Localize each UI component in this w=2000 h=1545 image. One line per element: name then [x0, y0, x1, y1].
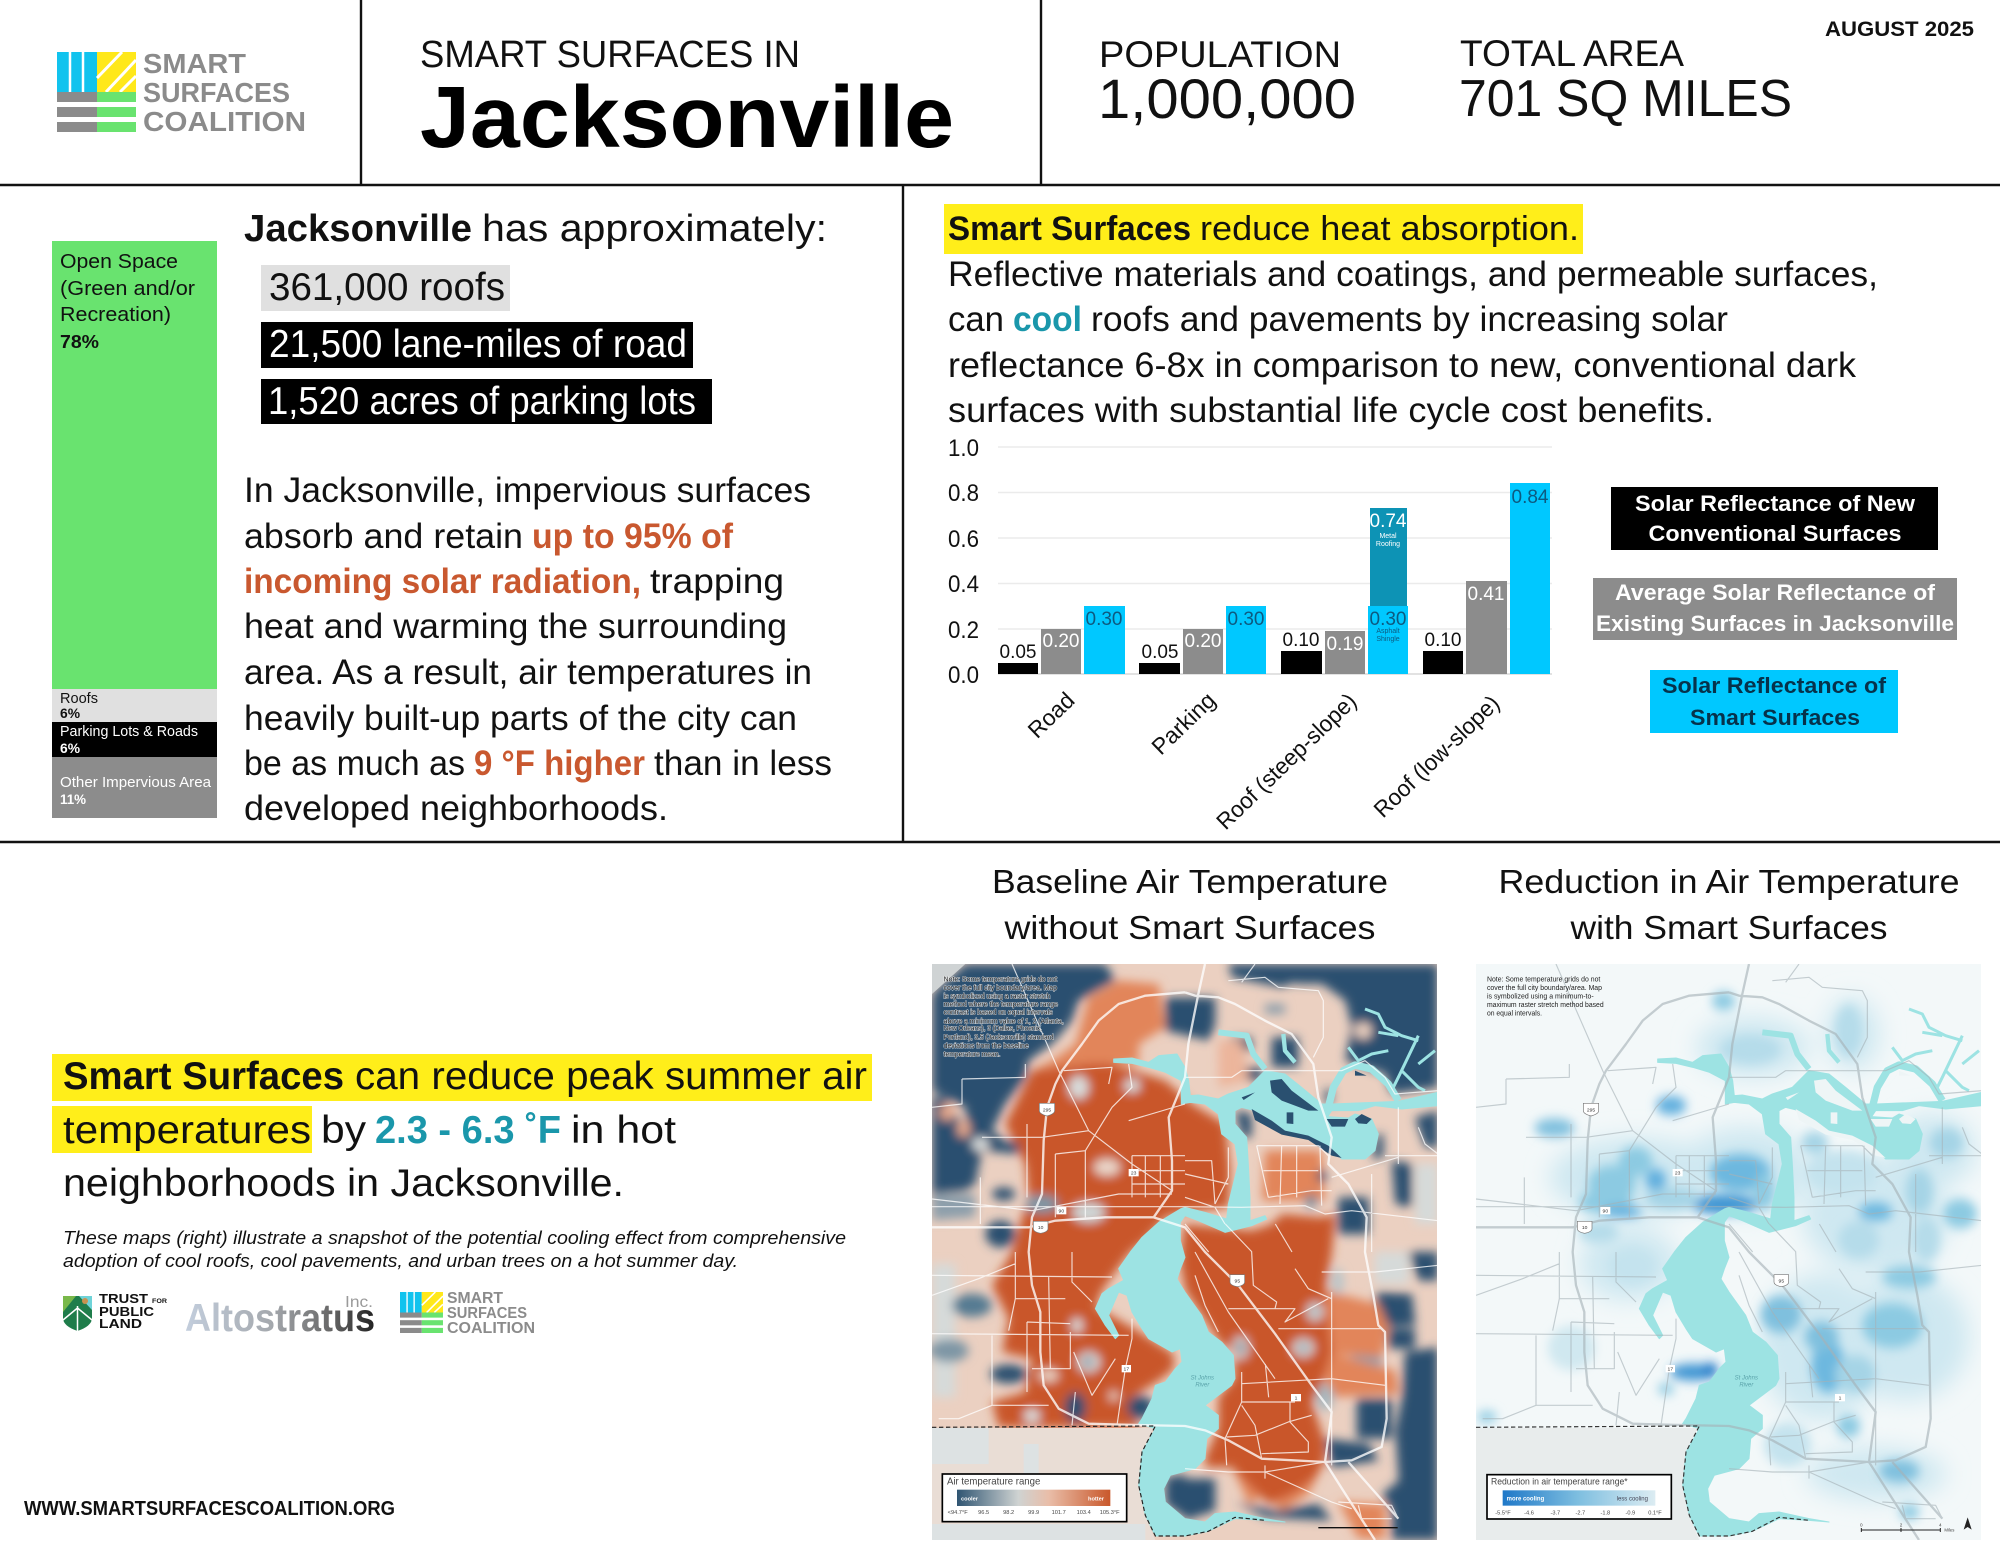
paragraph: impervious surfaces: heavily built-up parts of the city can: [244, 699, 797, 738]
stacked land cover bar: [52, 241, 217, 818]
highway shields: 90: [1603, 1209, 1608, 1215]
legend: smart surfaces: Smart Surfaces: [1690, 705, 1860, 730]
total area stat: 701 SQ MILES: [1459, 70, 1792, 128]
paragraph: impervious surfaces: trapping: [650, 562, 784, 601]
bars: roof low-slope: 0.84: [1512, 487, 1549, 508]
map legend: air temperature range: 101.7: [1052, 1510, 1066, 1516]
map legend: reduction range: Reduction in air temperature range*: [1491, 1476, 1628, 1486]
legend: new conventional: Solar Reflectance of New: [1635, 491, 1916, 516]
heading: Jacksonville has approximately: [244, 208, 827, 250]
paragraph: impervious surfaces: area. As a result, air temperatures in: [244, 653, 812, 692]
segment: other impervious: 11%: [60, 791, 87, 807]
x axis labels: Parking: [1146, 687, 1220, 760]
river label: [1190, 1375, 1214, 1386]
stat: road: 21,500 lane-miles of road: [269, 323, 687, 366]
map note: Note: Some temperature grids do not: [944, 976, 1057, 983]
map title: baseline: [992, 863, 1388, 946]
bars: roof steep-slope: 0.19: [1327, 634, 1363, 655]
logo: Trust for Public Land: PUBLIC: [99, 1304, 155, 1319]
segment: open space: 78%: [60, 332, 99, 352]
map legend: air temperature range: cooler: [961, 1496, 979, 1502]
bars: road: [998, 606, 1125, 674]
paragraph: reflective materials: roofs and pavements by increasing solar: [1091, 300, 1728, 339]
highway shields: 1: [1839, 1396, 1842, 1402]
bars: roof steep-slope: Asphalt: [1376, 628, 1400, 635]
bars: roof steep-slope: 0.74: [1370, 511, 1407, 532]
segment: roofs: Roofs: [60, 690, 98, 707]
paragraph: reflective materials: [948, 255, 1878, 430]
logo: Smart Surfaces Coalition: SMART: [143, 48, 246, 79]
bar chart: solar reflectance: [948, 435, 1552, 834]
y axis labels: 0.0: [948, 662, 979, 689]
date: AUGUST 2025: [1825, 18, 1974, 41]
river label: River: [1195, 1383, 1210, 1389]
scale bar and north arrow: Miles: [1944, 1527, 1954, 1532]
heading: peak summer air temperatures: in hot: [571, 1109, 676, 1152]
paragraph: impervious surfaces: absorb and retain: [244, 517, 523, 556]
segment: open space: [52, 241, 217, 689]
y axis labels: 0.8: [948, 480, 979, 507]
river label: St Johns: [1735, 1375, 1758, 1381]
website: WWW.SMARTSURFACESCOALITION.ORG: [24, 1498, 395, 1520]
x axis labels: [1023, 687, 1504, 834]
map legend: reduction range: -1.8: [1600, 1510, 1610, 1516]
map legend: air temperature range: 96.5: [978, 1510, 989, 1516]
paragraph: impervious surfaces: incoming solar radiation,: [244, 562, 641, 601]
bars: parking: 0.05: [1142, 642, 1178, 663]
heading: Smart Surfaces reduce heat absorption: [944, 204, 1583, 254]
bars: roof steep-slope: Roofing: [1376, 541, 1400, 548]
legend: existing average: Average Solar Reflectance of: [1615, 580, 1936, 605]
logo: Smart Surfaces Coalition small: [400, 1290, 535, 1337]
faint cooling haze: [1549, 997, 1976, 1501]
highway shields: 10: [1038, 1225, 1044, 1231]
map note: on equal intervals.: [1487, 1010, 1542, 1017]
logo: Smart Surfaces Coalition small: COALITION: [447, 1320, 535, 1337]
logo: Smart Surfaces Coalition small: SMART: [447, 1290, 503, 1307]
map note: New Orleans), 3 (Dallas, Phoenix,: [944, 1026, 1042, 1033]
stat: roofs: 361,000 roofs: [269, 266, 505, 309]
heading: peak summer air temperatures: 2.3 - 6.3 ˚F: [375, 1109, 561, 1152]
paragraph: impervious surfaces: developed neighborhoods.: [244, 789, 668, 828]
segment: parking and roads: 6%: [60, 740, 81, 756]
map legend: reduction range: 0.1°F: [1648, 1510, 1662, 1516]
highway shields: [1577, 1103, 1845, 1402]
map legend: reduction range: less cooling: [1617, 1496, 1648, 1502]
map caption: adoption of cool roofs, cool pavements, and urban trees on a hot summer day.: [63, 1251, 738, 1271]
light orange areas: [1032, 981, 1399, 1539]
paragraph: reflective materials: Reflective materials and coatings, and permeable surfaces,: [948, 255, 1878, 294]
heading: peak summer air temperatures: [52, 1054, 872, 1205]
bars: road: 0.30: [1086, 609, 1122, 630]
map legend: reduction range: -2.7: [1575, 1510, 1585, 1516]
paragraph: impervious surfaces: 9 °F higher: [474, 744, 645, 783]
x axis labels: Roof (steep-slope): [1211, 688, 1361, 834]
map note: cover the full city boundary/area. Map: [944, 985, 1057, 992]
segment: open space: (Green and/or: [60, 278, 195, 300]
highway shields: 295: [1043, 1108, 1051, 1114]
area outside city boundary: [1476, 1428, 1699, 1540]
paragraph: impervious surfaces: up to 95% of: [532, 517, 733, 556]
bars: roof steep-slope: Shingle: [1376, 636, 1400, 643]
highway shields: 17: [1124, 1367, 1129, 1373]
paragraph: reflective materials: cool: [1013, 300, 1082, 339]
bars: roof low-slope: [1423, 483, 1550, 674]
bars: parking: [1139, 606, 1266, 674]
title: SMART SURFACES IN: [420, 34, 800, 76]
highway shields: 295: [1587, 1108, 1595, 1114]
map legend: air temperature range: 99.9: [1028, 1510, 1039, 1516]
total area stat: TOTAL AREA: [1460, 33, 1684, 74]
cool and pale spots: [929, 1022, 1372, 1422]
legend: new conventional: [1611, 487, 1938, 550]
river label: River: [1739, 1383, 1754, 1389]
map note: above a minimum value of 1, 2 (Atlanta,: [944, 1018, 1064, 1025]
x axis labels: Road: [1023, 687, 1079, 743]
highway shields: 23: [1675, 1171, 1681, 1177]
map legend: reduction range: [1487, 1475, 1671, 1519]
heading: peak summer air temperatures: can reduce peak summer air: [355, 1055, 867, 1098]
legend: existing average: [1593, 578, 1957, 640]
map legend: air temperature range: 98.2: [1003, 1510, 1014, 1516]
map note: [944, 976, 1064, 1058]
heading: Jacksonville has approximately: has approximately:: [482, 208, 827, 250]
bars: roof steep-slope: Metal: [1379, 533, 1397, 540]
x axis labels: Roof (low-slope): [1368, 690, 1504, 823]
highway shields: 95: [1779, 1278, 1784, 1284]
map note: cover the full city boundary/area. Map: [1487, 985, 1602, 992]
y axis labels: [948, 435, 979, 689]
map note: maximum raster stretch method based: [1487, 1002, 1604, 1009]
map title: baseline: Baseline Air Temperature: [992, 863, 1388, 900]
highway shields: 23: [1131, 1171, 1137, 1177]
scale bar and north arrow: 2: [1900, 1523, 1903, 1528]
highway shields: 17: [1668, 1367, 1673, 1373]
scale bar and north arrow: [1860, 1517, 1972, 1532]
map title: reduction: [1498, 863, 1960, 946]
paragraph: impervious surfaces: than in less: [654, 744, 832, 783]
scale bar: [1318, 1526, 1398, 1530]
population stat: 1,000,000: [1098, 67, 1356, 130]
map title: reduction: Reduction in Air Temperature: [1498, 863, 1960, 900]
legend: smart surfaces: [1650, 670, 1898, 733]
map legend: reduction range: more cooling: [1507, 1496, 1545, 1502]
paragraph: impervious surfaces: heat and warming the surrounding: [244, 607, 787, 646]
river label: [1734, 1375, 1758, 1386]
highway shields: [1033, 1103, 1301, 1402]
logo: Altostratus Inc: Altostratus: [185, 1297, 375, 1340]
segment: open space: Recreation): [60, 304, 171, 326]
bars: roof steep-slope: 0.30: [1370, 609, 1406, 630]
logo: Trust for Public Land: [63, 1291, 168, 1331]
dark cool areas: [932, 964, 1438, 1540]
stat: parking: 1,520 acres of parking lots: [268, 380, 696, 423]
paragraph: reflective materials: can: [948, 300, 1004, 339]
highway shields: 10: [1582, 1225, 1588, 1231]
bars: roof steep-slope: 0.10: [1283, 630, 1319, 651]
map title: reduction: with Smart Surfaces: [1569, 909, 1888, 946]
logo: Altostratus Inc: Inc.: [345, 1294, 373, 1311]
logo: Smart Surfaces Coalition: SURFACES: [143, 77, 290, 108]
legend: existing average: Existing Surfaces in Jacksonville: [1596, 611, 1954, 636]
logo: Trust for Public Land: FOR: [152, 1299, 168, 1305]
logo: Smart Surfaces Coalition small: SURFACES: [447, 1305, 527, 1322]
logo: Trust for Public Land: TRUST: [99, 1291, 148, 1306]
y axis labels: 1.0: [948, 435, 979, 462]
legend: new conventional: Conventional Surfaces: [1648, 521, 1902, 546]
map legend: reduction range: -5.5°F: [1495, 1510, 1511, 1516]
total area stat: [1459, 33, 1792, 128]
y axis labels: 0.4: [948, 571, 979, 598]
bars: road: 0.05: [1000, 642, 1036, 663]
map legend: air temperature range: 103.4: [1077, 1510, 1091, 1516]
paragraph: reflective materials: surfaces with substantial life cycle cost benefits.: [948, 391, 1714, 430]
population stat: POPULATION: [1099, 34, 1341, 75]
map legend: air temperature range: [942, 1474, 1127, 1522]
segment: parking and roads: [52, 722, 217, 757]
logo: Smart Surfaces Coalition: [57, 48, 306, 137]
map note: Portland), 3.5 (Jacksonville) standard: [944, 1034, 1054, 1041]
map legend: air temperature range: <94.7°F: [948, 1510, 968, 1516]
legend: smart surfaces: Solar Reflectance of: [1662, 673, 1887, 698]
map caption: [63, 1228, 846, 1271]
river label: St Johns: [1191, 1375, 1214, 1381]
logo: Smart Surfaces Coalition: COALITION: [143, 106, 306, 137]
map legend: air temperature range: hotter: [1088, 1496, 1105, 1502]
heading: peak summer air temperatures: by: [321, 1109, 367, 1152]
population stat: [1098, 34, 1356, 130]
segment: other impervious: [52, 757, 217, 818]
map note: deviations from the baseline: [944, 1043, 1029, 1050]
scale bar and north arrow: 4: [1939, 1523, 1942, 1528]
y axis labels: 0.2: [948, 617, 979, 644]
map: baseline air temperature: [929, 964, 1438, 1540]
bars: roof low-slope: 0.41: [1468, 584, 1504, 605]
header divider lines: [0, 0, 2000, 842]
map note: [1487, 977, 1604, 1017]
map note: method where the temperature range: [944, 1002, 1058, 1009]
map legend: air temperature range: Air temperature range: [947, 1477, 1040, 1488]
segment: roofs: 6%: [60, 705, 81, 721]
bars: road: 0.20: [1043, 631, 1079, 652]
heading: peak summer air temperatures: temperatures: [63, 1109, 311, 1152]
bars: parking: 0.30: [1228, 609, 1264, 630]
map note: Note: Some temperature grids do not: [1487, 977, 1600, 984]
scale bar and north arrow: 0: [1860, 1523, 1863, 1528]
segment: open space: Open Space: [60, 251, 178, 273]
segment: other impervious: Other Impervious Area: [60, 774, 212, 791]
bars: roof steep-slope: [1281, 508, 1408, 674]
map legend: reduction range: -4.6: [1524, 1510, 1534, 1516]
paragraph: impervious surfaces: be as much as: [244, 744, 465, 783]
heading: Jacksonville has approximately: Jacksonville: [244, 208, 472, 250]
heading: Smart Surfaces reduce heat absorption: reduce heat absorption.: [1200, 210, 1579, 248]
title: Jacksonville: [420, 69, 954, 166]
area outside city boundary: [932, 1428, 1155, 1540]
highway shields: 90: [1059, 1209, 1064, 1215]
map: reduction in air temperature: [1476, 964, 1982, 1540]
heading: Smart Surfaces reduce heat absorption: Smart Surfaces: [948, 210, 1191, 248]
heading: peak summer air temperatures: neighborhoods in Jacksonville.: [63, 1162, 624, 1205]
paragraph: impervious surfaces: In Jacksonville, impervious surfaces: [244, 471, 811, 510]
map note: contrast is based on equal intervals: [944, 1010, 1053, 1017]
y axis labels: 0.6: [948, 526, 979, 553]
segment: roofs: [52, 689, 217, 722]
map note: is symbolized using a raster stretch: [944, 993, 1050, 1000]
map legend: reduction range: -3.7: [1550, 1510, 1560, 1516]
map legend: reduction range: -0.9: [1625, 1510, 1635, 1516]
map legend: air temperature range: 105.3°F: [1100, 1510, 1120, 1516]
highway shields: 1: [1295, 1396, 1298, 1402]
hot core areas: [992, 1064, 1335, 1504]
paragraph: reflective materials: reflectance 6-8x in comparison to new, conventional dark: [948, 346, 1857, 385]
highway shields: 95: [1235, 1278, 1240, 1284]
bars: roof low-slope: 0.10: [1425, 630, 1461, 651]
bars: parking: 0.20: [1185, 631, 1221, 652]
segment: parking and roads: Parking Lots & Roads: [60, 723, 198, 740]
map note: is symbolized using a minimum-to-: [1487, 994, 1594, 1001]
heading: peak summer air temperatures: Smart Surfaces: [63, 1055, 344, 1098]
logo: Trust for Public Land: LAND: [99, 1316, 142, 1331]
map title: baseline: without Smart Surfaces: [1003, 909, 1376, 946]
map note: temperature mean.: [944, 1051, 1000, 1058]
map caption: These maps (right) illustrate a snapshot of the potential cooling effect from comprehensive: [63, 1228, 846, 1248]
paragraph: impervious surfaces: [244, 471, 832, 828]
